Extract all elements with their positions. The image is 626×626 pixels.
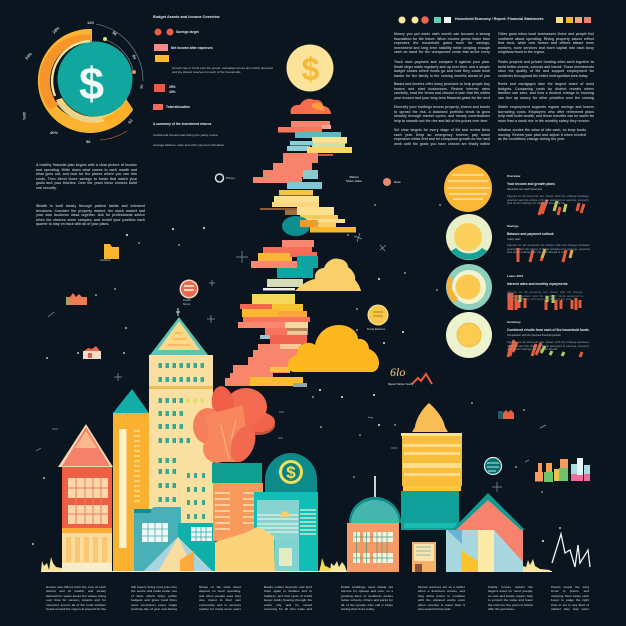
article column right: Inflation erodes the value of idle cash, so keep funds moving. Review your plan and adjust it when needed as the conditions change during the year. [498,128,586,141]
legend label four: Total allocation [166,105,190,109]
left text block: A healthy financial plan begins with a clear picture of income and spending. Write down what comes in each month and what goes out, and look for the places where you can trim costs. Then direct those savings to funds that match your goals and your timeline. Over the years these choices build real security. [36,163,137,190]
legend label three [169,85,176,94]
salmon tree [193,384,275,466]
article column right: Stable employment supports regular savings and lowers borrowing costs. Employers who offer retirement plans help staff build wealth, and those benefits can be worth far more than a small rise in the monthly salary they receive. [498,105,594,123]
donut chart: 18% [51,25,61,35]
globe icon [484,458,502,474]
legend note line three: Average balance, rates and other payment schedules [153,143,224,147]
grass tufts [41,557,550,572]
donut chart: 70 [139,84,144,89]
footer text columns: Family homes remain the largest asset for most people, so care and timely repairs help to protect the value and lower the risks for the years to follow after the purchase. [488,585,533,611]
article column right: Cities grow when local businesses thrive and people feel confident about spending. Rising property values reflect that trust, while new homes and offices attract more workers, more services and more capital into each busy neighbourhood in the region. [498,32,594,54]
right panel text two: Savings [507,224,519,228]
header with swatches [398,16,591,24]
mini coin [368,305,388,325]
teal dollar building: $ [286,463,296,482]
dome building [347,476,401,572]
donut chart: 84 [131,54,138,61]
house icon small [83,346,101,359]
teal dollar building [254,453,318,572]
header with swatches: Household Economy / Report: Financial Statements [455,17,543,21]
small house icon right [498,410,514,419]
donut chart: 56 [86,139,91,144]
house icon left [66,293,87,305]
orange tower [113,389,151,572]
top coin [286,44,334,92]
right panel text two: Balance and payment outlook [507,232,554,236]
right panel text one: Reported over each fiscal year [507,188,542,191]
heading: legend: Budget Assets and Income Overview [153,15,220,19]
small badge [216,174,224,182]
legend label three: 25% [169,85,176,89]
coin two [446,214,492,260]
right panel text three [507,274,583,301]
footer text columns [46,585,589,612]
upper money stack [253,99,356,236]
middle money stack and pale cloud [251,240,361,291]
legend label two: Net income after expenses [171,46,213,50]
badge label left: Pitsos [226,176,235,180]
low teal houses [134,507,215,572]
donut chart: 96 [111,30,119,37]
tent shape [143,537,213,572]
small salmon badge [383,178,391,186]
coin three [446,264,492,310]
large yellow cloud [288,325,379,372]
donut chart: 35% [22,112,27,120]
badge label centre: Market [349,175,359,179]
stacked tower [401,403,462,530]
badge label centre [346,175,362,183]
top coin: $ [302,51,320,87]
donut chart: 120 [87,20,94,25]
right panel text four: Summary [507,320,521,324]
right panel text one [507,174,589,205]
donut chart: 24% [24,51,33,61]
legend notes: A summary of the investment returns [153,122,211,126]
logo caption: Report Series Yearly [388,383,413,386]
legend swatches [153,28,174,110]
right panel text one: Overview [507,174,520,178]
background stars [32,204,561,545]
left text block: Wealth is built slowly through patient habits and informed decisions. Consider the property market, the stock market and your own business ideas together. Ask for professional advice when the choices seem complex, and revisit your position each quarter to stay on track with all of your plans. [36,204,145,226]
coin one [444,164,492,212]
trend logo: 6lo [390,365,405,379]
donut chart: $ [79,58,104,109]
footer text columns: Stored reserves act as a buffer when a downturn arrives, and they allow towns to continue with the planned works even when revenue is lower than it was expected last year. [418,585,465,611]
badge caption: Score [183,303,190,306]
right panel text four: Combined results from each of the household funds [507,328,589,332]
red house [58,424,113,572]
right panel text four: Comparison with the previous financial periods [507,334,561,337]
round badge [180,280,198,298]
sparkle marks [36,233,546,492]
legend note line two: Capital and interest paid during the yearly review [153,133,218,137]
right panel text three: Interest rates and monthly repayments [507,282,568,286]
house right [446,493,525,572]
legend label one: Savings target [176,30,199,34]
trend logo [390,365,432,384]
legend note: Growth rate of funds over the period, calculated across all monthly accounts and the shared reserves for each of the households [172,66,273,74]
coin four [446,312,492,358]
orange striped building [212,463,263,541]
badge label right: Data [394,180,401,184]
article column left: Diversify your holdings across property, shares and bonds to spread the risk. A balanced portfolio tends to grow steadily through market cycles, and steady contributions help to smooth out the rise and fall of the prices over time. [394,105,490,123]
donut chart: 40% [50,130,58,135]
folder caption: Archive [100,258,110,262]
right chart strokes [508,200,584,357]
article column left [394,32,490,146]
badge caption: Credit [183,299,190,302]
lower money stack [225,294,310,387]
article column right [498,32,594,141]
right panel text two [507,224,590,254]
footer text columns: Public buildings need steady tax income for upkeep and care, so a growing base of residents means better schools, clinics and parks for all of the people who call it home during their lives today. [341,585,393,611]
donut chart [22,20,144,144]
right panel text two: Yearly rates [507,238,521,241]
ground line [41,571,552,572]
tall cream tower [149,308,213,525]
right panel text three: Loans 2024 [507,274,523,278]
kiosk [412,542,436,572]
badge label centre: Share Value [346,179,362,183]
donut chart: 62 [127,117,134,125]
folder icon [104,244,119,259]
right panel text four [507,320,589,351]
right panel text one: Your income and growth plans [507,182,555,186]
small captions [100,258,386,331]
legend label three: 40% [169,90,176,94]
mini bar chart [535,458,590,482]
pale house [215,527,275,572]
line chart [552,534,590,567]
badge caption [183,299,190,306]
article column right: Public projects and private funding often work together to build better streets, schools and transit. These investments raise the quality of life and support employment for residents throughout the entire metropolitan area today. [498,60,594,78]
left text block [36,163,145,226]
coin caption: Bond Returns [367,327,386,331]
